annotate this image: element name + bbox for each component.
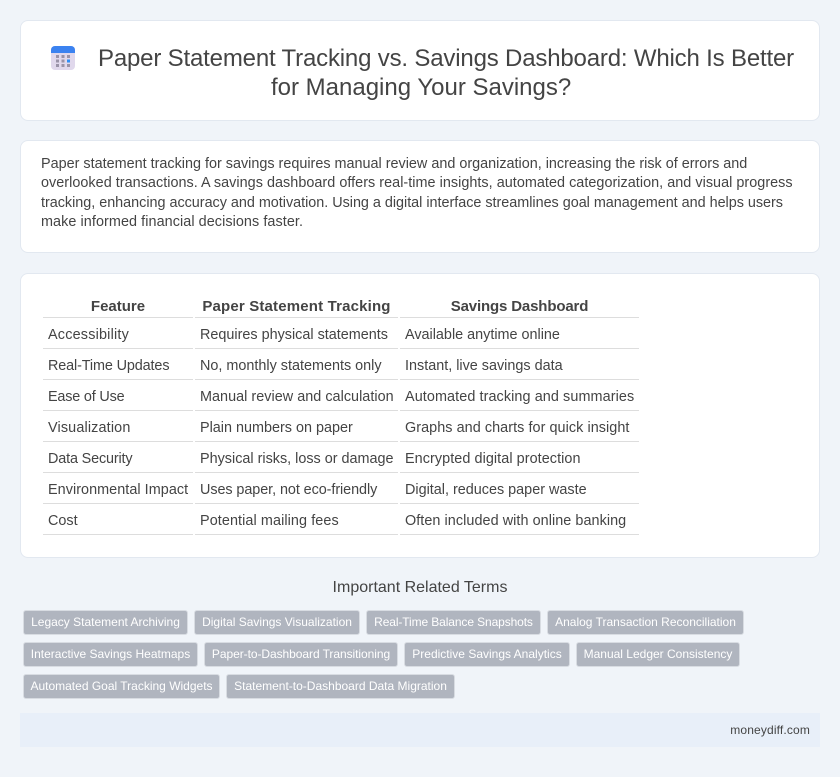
panel: intro text card bbox=[20, 140, 820, 253]
comparison table: No, monthly statements only bbox=[200, 358, 382, 374]
intro paragraph: overlooked transactions. A savings dashboard offers real-time insights, automated categorization, and visual progress bbox=[41, 175, 793, 191]
panel: comparison table card bbox=[20, 273, 820, 558]
title: for Managing Your Savings? bbox=[271, 74, 571, 101]
comparison table: Instant, live savings data bbox=[405, 358, 563, 374]
footer source text: moneydiff.com bbox=[730, 723, 810, 737]
comparison table: Potential mailing fees bbox=[200, 513, 339, 529]
comparison table: Manual review and calculation bbox=[200, 389, 394, 405]
comparison table: Accessibility bbox=[48, 327, 129, 343]
intro paragraph: Paper statement tracking for savings requires manual review and organization, increasing the risk of errors and bbox=[41, 156, 747, 172]
related terms tags: Analog Transaction Reconciliation bbox=[555, 615, 736, 629]
intro paragraph: tracking, enhancing accuracy and motivation. Using a digital interface streamlines goal management and helps users bbox=[41, 195, 783, 211]
comparison table: Digital, reduces paper waste bbox=[405, 482, 587, 498]
title: Paper Statement Tracking vs. Savings Dashboard: Which Is Better bbox=[98, 45, 794, 72]
comparison table: Uses paper, not eco-friendly bbox=[200, 482, 377, 498]
comparison table: Ease of Use bbox=[48, 389, 124, 405]
comparison table: Cost bbox=[48, 513, 78, 529]
related terms tags bbox=[23, 610, 744, 699]
related terms tags: Manual Ledger Consistency bbox=[584, 647, 732, 661]
heading: related terms: Important Related Terms bbox=[333, 579, 507, 596]
panel: title card bbox=[20, 20, 820, 121]
related terms tags: Digital Savings Visualization bbox=[202, 615, 352, 629]
related terms tags: Predictive Savings Analytics bbox=[412, 647, 562, 661]
comparison table: Savings Dashboard bbox=[451, 298, 588, 315]
related terms tags: Legacy Statement Archiving bbox=[31, 615, 180, 629]
related terms tags: Paper-to-Dashboard Transitioning bbox=[212, 647, 390, 661]
comparison table: Available anytime online bbox=[405, 327, 560, 343]
comparison table: Encrypted digital protection bbox=[405, 451, 581, 467]
related terms tags: Real-Time Balance Snapshots bbox=[374, 615, 533, 629]
comparison table: Paper Statement Tracking bbox=[202, 298, 391, 315]
intro paragraph bbox=[41, 156, 793, 230]
footer bar bbox=[20, 713, 820, 747]
comparison table: Physical risks, loss or damage bbox=[200, 451, 394, 467]
comparison table: Plain numbers on paper bbox=[200, 420, 353, 436]
comparison table: Automated tracking and summaries bbox=[405, 389, 634, 405]
title bbox=[98, 45, 794, 101]
comparison table: Real-Time Updates bbox=[48, 358, 169, 374]
comparison table: Data Security bbox=[48, 451, 132, 467]
comparison table: Often included with online banking bbox=[405, 513, 626, 529]
related terms tags: Automated Goal Tracking Widgets bbox=[30, 679, 213, 693]
related terms tags: Interactive Savings Heatmaps bbox=[31, 647, 190, 661]
comparison table: Feature bbox=[91, 298, 145, 315]
intro paragraph: make informed financial decisions faster. bbox=[41, 214, 303, 230]
comparison table: Requires physical statements bbox=[200, 327, 388, 343]
related terms tags: Statement-to-Dashboard Data Migration bbox=[234, 679, 447, 693]
comparison table: Graphs and charts for quick insight bbox=[405, 420, 629, 436]
icon: calendar bbox=[51, 46, 75, 70]
comparison table: Visualization bbox=[48, 420, 130, 436]
comparison table: Environmental Impact bbox=[48, 482, 188, 498]
comparison table bbox=[43, 298, 639, 535]
